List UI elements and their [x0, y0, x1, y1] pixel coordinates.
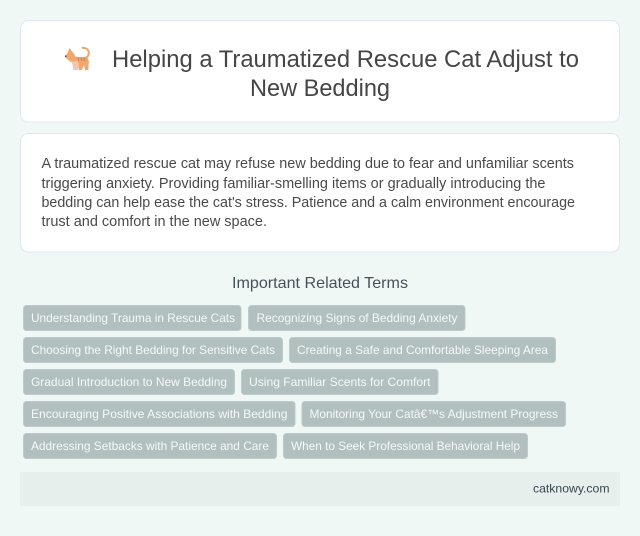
- footer source text: catknowy.com: [533, 482, 610, 496]
- description text: triggering anxiety. Providing familiar-smelling items or gradually introducing the: [42, 176, 546, 192]
- tag: professional help: When to Seek Professional Behavioral Help: [291, 439, 520, 453]
- tag: recognizing signs: [248, 306, 465, 330]
- tag: safe sleeping area: [290, 338, 556, 362]
- tag: addressing setbacks: [24, 434, 276, 458]
- title text: Helping a Traumatized Rescue Cat Adjust to: [112, 46, 579, 73]
- heading: important related terms: Important Related Terms: [232, 275, 408, 292]
- tag: understanding trauma: [24, 306, 241, 330]
- icon: orange cat: [65, 48, 89, 70]
- tag: addressing setbacks: Addressing Setbacks with Patience and Care: [31, 439, 269, 453]
- tag: choosing bedding: [24, 338, 282, 362]
- title text: [112, 46, 579, 102]
- tag: understanding trauma: Understanding Trauma in Rescue Cats: [31, 311, 235, 325]
- title text: New Bedding: [250, 75, 390, 102]
- tag: monitoring progress: [302, 402, 566, 426]
- panel: description: [20, 134, 620, 252]
- tag: familiar scents: Using Familiar Scents for Comfort: [249, 375, 431, 389]
- footer: [20, 472, 620, 506]
- description text: bedding can help ease the cat's stress. Patience and a calm environment encourage: [42, 195, 575, 211]
- description text: A traumatized rescue cat may refuse new bedding due to fear and unfamiliar scents: [42, 156, 574, 172]
- tag: safe sleeping area: Creating a Safe and Comfortable Sleeping Area: [297, 343, 548, 357]
- tag: choosing bedding: Choosing the Right Bedding for Sensitive Cats: [31, 343, 275, 357]
- panel: title header: [20, 20, 620, 122]
- panel: related term tags: [24, 306, 566, 458]
- tag: recognizing signs: Recognizing Signs of Bedding Anxiety: [256, 311, 458, 325]
- tag: gradual introduction: [24, 370, 234, 394]
- tag: familiar scents: [242, 370, 438, 394]
- tag: positive associations: Encouraging Positive Associations with Bedding: [31, 407, 288, 421]
- tag: positive associations: [24, 402, 295, 426]
- tag: monitoring progress: Monitoring Your Catâ€™s Adjustment Progress: [310, 407, 558, 421]
- tag: professional help: [284, 434, 528, 458]
- description text: [42, 156, 575, 230]
- tag: gradual introduction: Gradual Introduction to New Bedding: [31, 375, 227, 389]
- description text: trust and comfort in the new space.: [42, 214, 267, 230]
